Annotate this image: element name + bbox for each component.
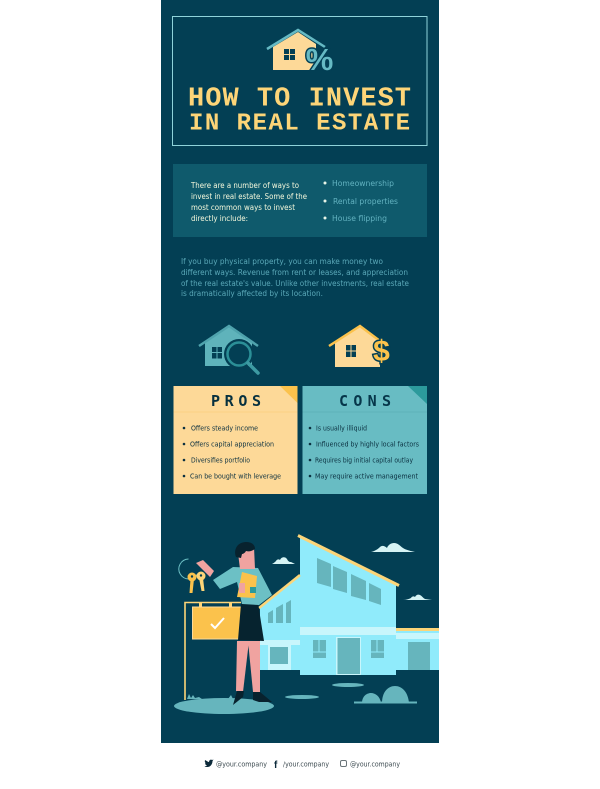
title — [188, 84, 411, 138]
hair — [235, 542, 255, 558]
list of direct investment types — [324, 179, 398, 223]
main block — [300, 537, 396, 675]
clouds — [272, 543, 432, 600]
icon: house with magnifier — [199, 326, 258, 373]
paragraph: of the real estate's value. Unlike other investments, real estate — [181, 279, 409, 288]
legs — [236, 641, 249, 692]
cons list: Is usually illiquid — [316, 424, 367, 432]
hand — [196, 560, 214, 577]
panel: pros — [174, 386, 298, 494]
illustration: house — [259, 536, 439, 675]
cons list: Requires big initial capital outlay — [315, 456, 413, 464]
title frame — [172, 16, 427, 146]
pros heading: PROS — [211, 392, 261, 410]
instagram handle: @your.company — [350, 760, 400, 768]
facebook handle: /your.company — [283, 760, 329, 768]
paragraph: is dramatically affected by its location. — [181, 289, 323, 298]
skirt — [238, 603, 264, 641]
cons heading: CONS — [339, 392, 391, 410]
panel: intro box — [173, 164, 427, 237]
panel: cons — [302, 386, 427, 494]
intro text — [190, 181, 307, 223]
twitter handle: @your.company — [216, 760, 267, 768]
title: IN REAL ESTATE — [189, 110, 410, 138]
footer: social links — [204, 760, 400, 771]
woman with keys and folder — [196, 542, 272, 705]
icon: house with percent sign: % — [306, 42, 333, 77]
torso and arm — [213, 567, 272, 605]
folder — [237, 572, 257, 598]
list of direct investment types: Rental properties — [333, 197, 398, 206]
icon: instagram — [340, 760, 346, 766]
left wing — [260, 575, 300, 670]
title: HOW TO INVEST — [188, 84, 411, 114]
pros list: Can be bought with leverage — [190, 472, 281, 480]
icon: house with dollar sign: $ — [373, 335, 390, 368]
pros list: Offers capital appreciation — [190, 440, 274, 448]
icon: house with percent sign — [267, 30, 333, 77]
pros list — [183, 424, 281, 480]
right wing — [396, 630, 439, 670]
neck and face — [238, 547, 255, 569]
sign post — [185, 602, 242, 700]
ground — [174, 683, 417, 714]
paragraph: If you buy physical property, you can make money two — [181, 257, 383, 266]
shoes — [233, 691, 272, 705]
cons list: May require active management — [315, 472, 418, 480]
icon: house with dollar sign: $ — [373, 335, 390, 368]
paragraph — [181, 257, 409, 298]
icon: house with dollar sign — [329, 326, 390, 368]
intro text: most common ways to invest — [191, 203, 295, 212]
list of direct investment types: Homeownership — [332, 179, 394, 188]
icon: facebook: f — [274, 760, 278, 771]
list of direct investment types: House flipping — [332, 214, 387, 223]
background panel — [161, 0, 439, 743]
intro text: directly include: — [191, 214, 248, 223]
icon: house with percent sign: % — [306, 42, 333, 77]
pros list: Diversifies portfolio — [191, 456, 250, 464]
paragraph: different ways. Revenue from rent or leases, and appreciation — [181, 268, 408, 277]
pros list: Offers steady income — [191, 424, 258, 432]
cons list: Influenced by highly local factors — [316, 440, 419, 448]
cons list — [309, 424, 419, 480]
icon: keys — [179, 559, 206, 593]
intro text: invest in real estate. Some of the — [191, 192, 307, 201]
icon: twitter — [204, 760, 214, 767]
intro text: There are a number of ways to — [190, 181, 299, 190]
